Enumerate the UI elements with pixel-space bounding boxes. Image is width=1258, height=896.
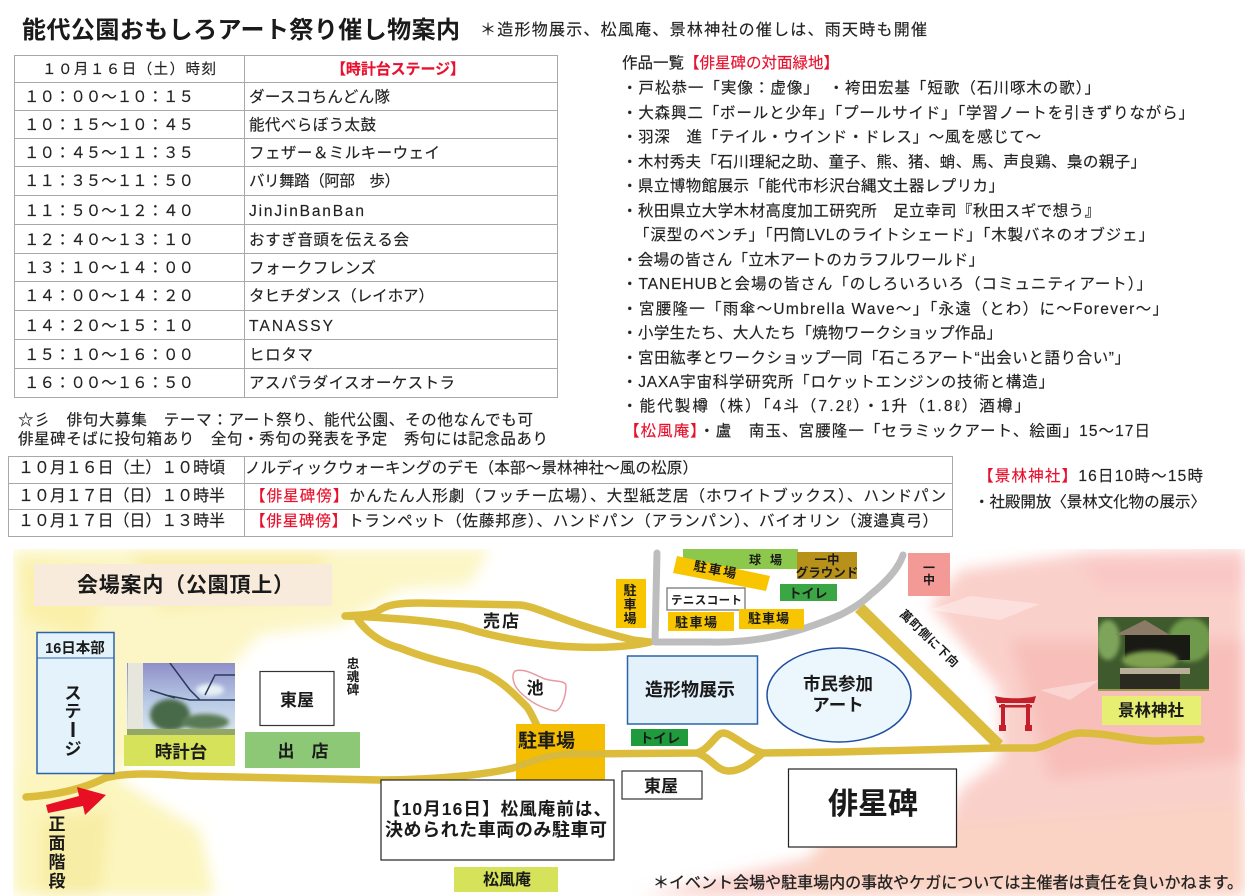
parking vertical: 場 <box>623 611 637 626</box>
parking vertical: 駐 <box>623 583 637 598</box>
table: stage timetable: フォークフレンズ <box>249 259 376 277</box>
pond: 池 <box>526 679 544 698</box>
first junior high ground <box>796 552 858 580</box>
citizen art: アート <box>812 695 864 715</box>
memorial label: 魂 <box>347 669 360 684</box>
sculpture exhibit: 造形物展示 <box>645 680 735 700</box>
stalls: 出 店 <box>278 742 328 761</box>
stalls <box>245 732 360 768</box>
table: stage timetable: １０：１５～１０：４５ <box>24 117 194 134</box>
front stairs label: 面 <box>48 834 66 853</box>
yellow watercolor background <box>13 549 490 896</box>
table: stage timetable: フェザー＆ミルキーウェイ <box>249 144 440 162</box>
shrine hours <box>974 467 1206 511</box>
table: stage timetable: １５：１０～１６：００ <box>24 347 194 364</box>
sculpture exhibit <box>628 656 758 724</box>
table: stage timetable: １１：５０～１２：４０ <box>24 203 194 220</box>
parking notice: 決められた車両のみ駐車可 <box>385 820 607 840</box>
front stairs label <box>48 815 66 891</box>
haiseihi monument <box>788 769 956 847</box>
artwork list: ・小学生たち、大人たち「焼物ワークショップ作品」 <box>622 324 1002 342</box>
table: stage timetable <box>14 55 558 398</box>
icon: torii <box>995 696 1036 731</box>
table: other events: ノルディックウォーキングのデモ（本部～景林神社～風の松原） <box>245 458 698 477</box>
label: clock tower <box>124 735 235 766</box>
table: stage timetable: 能代べらぼう太鼓 <box>249 116 376 134</box>
artwork list: 【松風庵】・盧 南玉、宮腰隆一「セラミックアート、絵画」15～17日 <box>624 422 1150 440</box>
table: stage timetable: １２：４０～１３：１０ <box>24 232 194 249</box>
table: other events: 【俳星碑傍】トランペット（佐藤邦彦）、ハンドパン（アランパン）、バイオリン（渡邉真弓） <box>250 512 938 530</box>
table: stage timetable: １０：４５～１１：３５ <box>24 145 194 162</box>
artwork list: ・宮田紘孝とワークショップ一同「石ころアート“出会いと語り合い”」 <box>622 349 1130 367</box>
first junior high: 中 <box>923 572 935 587</box>
shrine hours: 【景林神社】16日10時～15時 <box>978 467 1203 485</box>
stage: 16日本部 <box>45 640 105 657</box>
table: stage timetable: バリ舞踏（阿部 歩） <box>249 172 400 190</box>
parking: baseball side: 駐車場 <box>748 611 789 626</box>
stage: テ <box>64 702 82 721</box>
haiku notice: ☆彡 俳句大募集 テーマ：アート祭り、能代公園、その他なんでも可 <box>18 411 533 429</box>
map panel <box>13 549 1245 896</box>
table: stage timetable: １４：００～１４：２０ <box>24 288 194 305</box>
parking row: 駐車場 <box>675 615 717 630</box>
artwork list: ・木村秀夫「石川理紀之助、童子、熊、猪、蛸、馬、声良鶏、梟の親子」 <box>622 153 1146 171</box>
label: shrine: 景林神社 <box>1118 701 1184 720</box>
artwork list: 「涙型のベンチ」「円筒LVLのライトシェード」「木製バネのオブジェ」 <box>634 225 1154 244</box>
haiku notice <box>18 411 548 448</box>
toilet south: トイレ <box>640 731 680 746</box>
citizen art: 市民参加 <box>803 674 873 694</box>
table: stage timetable: １４：２０～１５：１０ <box>24 318 194 335</box>
artwork list <box>622 54 1194 440</box>
artwork list: ・宮腰隆一「雨傘～Umbrella Wave～」「永遠（とわ）に～Forever～」 <box>622 300 1168 318</box>
table: stage timetable: おすぎ音頭を伝える会 <box>249 231 409 249</box>
pink watercolor background <box>640 549 1245 896</box>
parking: baseball side <box>616 549 950 631</box>
artwork list: ・羽深 進「テイル・ウインド・ドレス」～風を感じて～ <box>622 128 1041 146</box>
memorial label: 碑 <box>347 682 360 697</box>
first junior high: 一 <box>923 561 935 575</box>
stage: ス <box>64 684 82 703</box>
photo: shrine <box>1096 617 1212 691</box>
shop label: 売店 <box>483 611 519 631</box>
main parking <box>516 724 605 780</box>
pond <box>513 670 566 711</box>
parking vertical: 車 <box>623 597 637 612</box>
first junior high ground: 一中 <box>814 552 840 567</box>
parking angled <box>673 556 770 591</box>
shrine hours: ・社殿開放〈景林文化物の展示〉 <box>974 493 1206 511</box>
toilet south <box>631 729 688 746</box>
memorial label <box>347 656 360 697</box>
photo: clock tower <box>127 663 235 735</box>
arbor east: 東屋 <box>644 777 678 796</box>
toilet north <box>780 584 837 601</box>
shofuan label: 松風庵 <box>483 870 531 889</box>
table: stage timetable: １０月１６日（土）時刻 <box>42 61 216 78</box>
stage: ジ <box>64 740 82 759</box>
table: stage timetable: JinJinBanBan <box>249 203 364 220</box>
road label: 萬町側に下向 <box>897 606 962 670</box>
toilet north: トイレ <box>788 586 828 601</box>
shofuan label <box>454 867 558 892</box>
memorial label: 忠 <box>347 656 360 671</box>
table: other events: １０月１７日（日）１０時半 <box>18 487 225 505</box>
label: shrine <box>1102 696 1201 725</box>
artwork list: 作品一覧【俳星碑の対面緑地】 <box>622 54 839 72</box>
table: stage timetable: ダースコちんどん隊 <box>249 88 390 106</box>
parking notice <box>381 780 614 860</box>
label: clock tower: 時計台 <box>155 742 207 762</box>
artwork list: ・能代製樽（株）「4斗（7.2ℓ）・1升（1.8ℓ）酒樽」 <box>622 397 1030 415</box>
haiseihi monument: 俳星碑 <box>828 788 918 821</box>
first junior high ground: グラウンド <box>796 565 858 580</box>
roads <box>26 553 1201 797</box>
table: stage timetable: TANASSY <box>249 318 333 335</box>
table: other events: １０月１６日（土）１０時頃 <box>18 459 225 477</box>
arbor west: 東屋 <box>280 691 314 710</box>
citizen art <box>767 648 911 742</box>
arbor east <box>622 771 702 799</box>
baseball field: 球 場 <box>749 552 782 567</box>
table: other events: 【俳星碑傍】かんたん人形劇（フッチー広場）、大型紙芝居（ホワイトブックス）、ハンドパン <box>250 486 946 505</box>
table: other events <box>8 456 953 536</box>
table: stage timetable: ヒロタマ <box>249 346 313 364</box>
title: 能代公園おもしろアート祭り催し物案内 <box>22 17 460 44</box>
artwork list: ・会場の皆さん「立木アートのカラフルワールド」 <box>622 251 984 269</box>
arrow: front stairs <box>46 787 106 815</box>
main parking: 駐車場 <box>518 730 575 752</box>
parking row <box>668 612 734 631</box>
table: stage timetable: アスパラダイスオーケストラ <box>249 374 455 392</box>
tennis court <box>667 588 745 610</box>
map heading: 会場案内（公園頂上） <box>77 574 294 597</box>
road label <box>890 600 972 681</box>
stage <box>37 632 114 774</box>
rain note: ＊造形物展示、松風庵、景林神社の催しは、雨天時も開催 <box>480 21 927 39</box>
first junior high <box>908 553 950 596</box>
baseball field <box>683 549 798 569</box>
artwork list: ・JAXA宇宙科学研究所「ロケットエンジンの技術と構造」 <box>622 373 1054 391</box>
table: stage timetable: 【時計台ステージ】 <box>331 60 465 78</box>
artwork list: ・TANEHUBと会場の皆さん「のしろいろいろ（コミュニティアート）」 <box>622 275 1152 293</box>
tennis court: テニスコート <box>671 594 742 607</box>
table: other events: １０月１７日（日）１３時半 <box>18 512 225 530</box>
artwork list: ・秋田県立大学木材高度加工研究所 足立幸司『秋田スギで想う』 <box>622 202 1100 220</box>
table: stage timetable: １１：３５～１１：５０ <box>24 173 194 190</box>
front stairs label: 階 <box>48 853 66 872</box>
haiku notice: 俳星碑そばに投句箱あり 全句・秀句の発表を予定 秀句には記念品あり <box>18 430 548 448</box>
artwork list: ・大森興二「ボールと少年」「プールサイド」「学習ノートを引きずりながら」 <box>622 104 1194 122</box>
parking vertical <box>616 579 646 628</box>
front stairs label: 正 <box>48 815 66 834</box>
arbor west <box>260 672 334 726</box>
front stairs label: 段 <box>48 872 66 891</box>
table: stage timetable: １６：００～１６：５０ <box>24 375 194 392</box>
table: stage timetable: タヒチダンス（レイホア） <box>249 287 434 305</box>
artwork list: ・戸松恭一「実像：虚像」 ・袴田宏基「短歌（石川啄木の歌）」 <box>622 79 1100 97</box>
parking notice: 【10月16日】松風庵前は、 <box>383 799 611 819</box>
table: stage timetable: １３：１０～１４：００ <box>24 260 194 277</box>
parking angled: 駐車場 <box>692 558 737 581</box>
artwork list: ・県立博物館展示「能代市杉沢台縄文土器レプリカ」 <box>622 177 1004 195</box>
map heading <box>34 564 332 606</box>
disclaimer: ＊イベント会場や駐車場内の事故やケガについては主催者は責任を負いかねます。 <box>653 874 1243 892</box>
table: stage timetable: １０：００～１０：１５ <box>24 89 194 106</box>
